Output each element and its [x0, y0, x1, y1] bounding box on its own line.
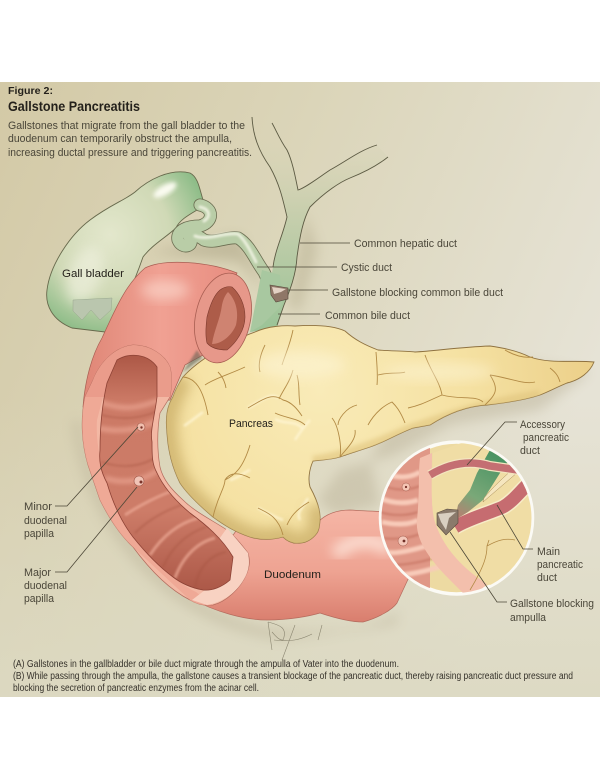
inset main duct	[455, 484, 528, 527]
label: major duodenal papilla: Major	[24, 567, 51, 579]
label: minor duodenal papilla: Minor	[24, 501, 52, 513]
gallbladder sac	[47, 172, 205, 332]
label: common hepatic duct: Common hepatic duct	[354, 238, 457, 250]
label: gallstone blocking ampulla	[510, 598, 594, 624]
inset circle: ampulla detail	[380, 440, 540, 600]
label: duodenum: Duodenum	[264, 569, 321, 581]
figure number: Figure 2:	[8, 85, 53, 97]
cut wall of duodenum	[82, 345, 249, 605]
gallstone in gallbladder	[73, 298, 112, 320]
label: main pancreatic duct: duct	[537, 572, 557, 584]
inset left lumen folds	[382, 448, 430, 588]
lower duodenum tube	[190, 510, 432, 622]
intro text: increasing ductal pressure and triggering pancreatitis.	[8, 147, 252, 159]
intro text: Gallstones that migrate from the gall bladder to the	[8, 120, 245, 132]
label: accessory pancreatic duct: pancreatic	[523, 432, 569, 444]
illustration: pancreas	[166, 326, 594, 543]
caption: (A) Gallstones in the gallbladder or bile duct migrate through the ampulla of Vater into the duodenum.	[13, 659, 399, 670]
inset stone	[437, 509, 458, 535]
illustration: gallbladder and bile ducts	[47, 117, 388, 332]
label: gall bladder: Gall bladder	[62, 268, 124, 280]
label: minor duodenal papilla: papilla	[24, 528, 55, 540]
intro text	[8, 120, 252, 159]
label: major duodenal papilla	[24, 567, 67, 605]
label: gallstone blocking common bile duct: Gallstone blocking common bile duct	[332, 287, 503, 299]
caption	[13, 659, 573, 694]
illustration shadows	[72, 212, 590, 640]
duodenal lumen with folds	[99, 354, 234, 590]
title: Gallstone Pancreatitis	[8, 98, 140, 114]
inset wall	[417, 453, 487, 600]
caption: blocking the secretion of pancreatic enzymes from the acinar cell.	[13, 683, 259, 694]
label: common bile duct: Common bile duct	[325, 310, 410, 322]
intro text: duodenum can temporarily obstruct the ampulla,	[8, 133, 232, 145]
label: main pancreatic duct: pancreatic	[537, 559, 583, 571]
illustration: duodenum	[82, 262, 432, 622]
inset pancreas tissue	[433, 443, 532, 585]
background paper panel	[0, 82, 600, 697]
cystic duct	[178, 205, 270, 285]
upper duodenum tube	[83, 262, 237, 407]
minor papilla	[137, 423, 145, 431]
inset cream fold	[482, 473, 517, 502]
label: main pancreatic duct	[537, 546, 583, 584]
label: minor duodenal papilla: duodenal	[24, 515, 67, 527]
label: cystic duct: Cystic duct	[341, 262, 392, 274]
label: major duodenal papilla: duodenal	[24, 580, 67, 592]
inset accessory duct	[430, 463, 518, 475]
label: accessory pancreatic duct: Accessory	[520, 419, 565, 431]
upper cut ring of duodenum	[183, 268, 259, 372]
hepatic duct branches	[250, 117, 388, 332]
inset green lumen	[455, 450, 508, 520]
major papilla	[134, 476, 144, 486]
leader lines	[55, 243, 533, 602]
gallstone blocking common bile duct	[270, 285, 288, 302]
label: accessory pancreatic duct	[520, 419, 569, 457]
label: pancreas: Pancreas	[229, 418, 273, 430]
inset papillae	[402, 483, 410, 491]
label: accessory pancreatic duct: duct	[520, 445, 540, 457]
label: minor duodenal papilla	[24, 501, 67, 540]
label: gallstone blocking ampulla: ampulla	[510, 612, 547, 624]
label: gallstone blocking ampulla: Gallstone blocking	[510, 598, 594, 610]
label: main pancreatic duct: Main	[537, 546, 560, 558]
label: major duodenal papilla: papilla	[24, 593, 55, 605]
signature	[268, 622, 322, 660]
